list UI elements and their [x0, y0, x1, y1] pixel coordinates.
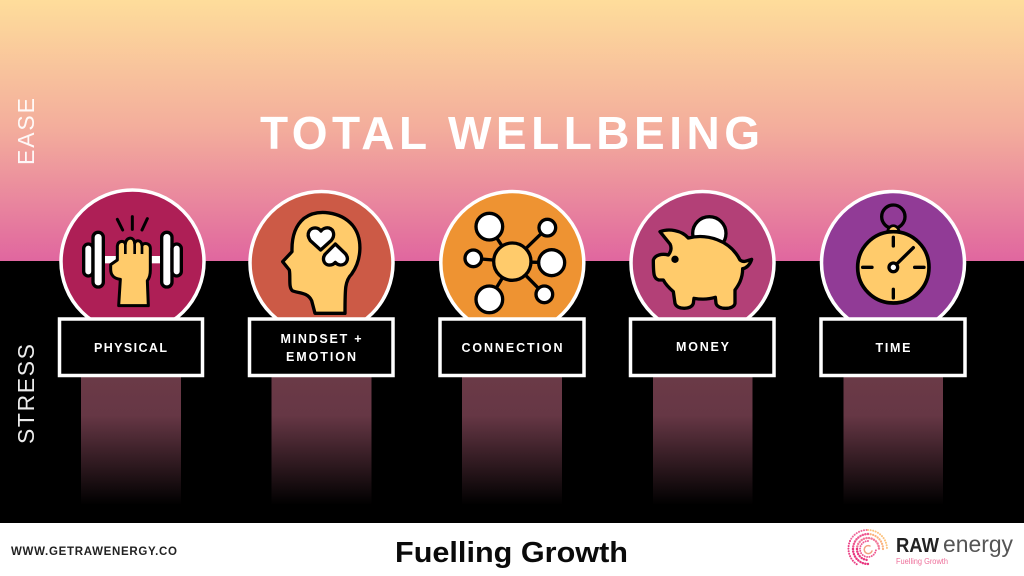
label: time: TIME: [876, 341, 910, 355]
label: money: MONEY: [676, 340, 730, 354]
pillar: money: [630, 192, 774, 376]
label: physical: PHYSICAL: [94, 341, 167, 355]
label: mindset and emotion: MINDSET +: [280, 332, 362, 346]
pillar: connection: [440, 192, 584, 376]
pillar: physical: [60, 190, 204, 376]
axis label: stress: STRESS: [13, 344, 39, 444]
pillar: time: [821, 192, 965, 376]
footer: tagline: Fuelling Growth: [395, 537, 628, 569]
logo: wordmark energy: energy: [943, 531, 1013, 557]
icon: dumbbell and fist: [84, 217, 181, 306]
circle: mindset: [250, 192, 393, 334]
label box: time: [821, 319, 965, 376]
label box: connection: [440, 319, 584, 376]
circle: connection: [441, 192, 584, 334]
logo: wordmark raw: RAW: [896, 535, 939, 557]
pillar: mindset and emotion: [250, 192, 393, 376]
icon: head with hearts: [283, 213, 360, 313]
circle: money: [631, 192, 774, 334]
fading bars: [81, 377, 943, 505]
logo: fuelling growth strapline: Fuelling Growth: [896, 557, 948, 566]
label box: physical: [60, 319, 202, 376]
title: TOTAL WELLBEING: [260, 107, 760, 159]
circle: physical: [61, 190, 204, 333]
label box: mindset: [250, 319, 393, 376]
label: mindset and emotion: EMOTION: [286, 350, 356, 364]
background: ease gradient: [0, 0, 1024, 262]
background: stress band: [0, 261, 1024, 523]
footer band: [0, 523, 1024, 576]
footer: website: WWW.GETRAWENERGY.CO: [11, 546, 177, 558]
label: connection: CONNECTION: [462, 341, 562, 355]
icon: stopwatch: [858, 205, 929, 303]
label: mindset and emotion: [280, 332, 362, 364]
icon: network nodes: [465, 213, 565, 313]
logo: raw energy: [848, 530, 1013, 566]
label box: money: [630, 319, 774, 376]
logo: dotted spiral: [848, 530, 887, 565]
circle: time: [822, 192, 964, 334]
axis label: ease: EASE: [13, 98, 39, 165]
icon: piggy bank and coin: [653, 217, 752, 308]
